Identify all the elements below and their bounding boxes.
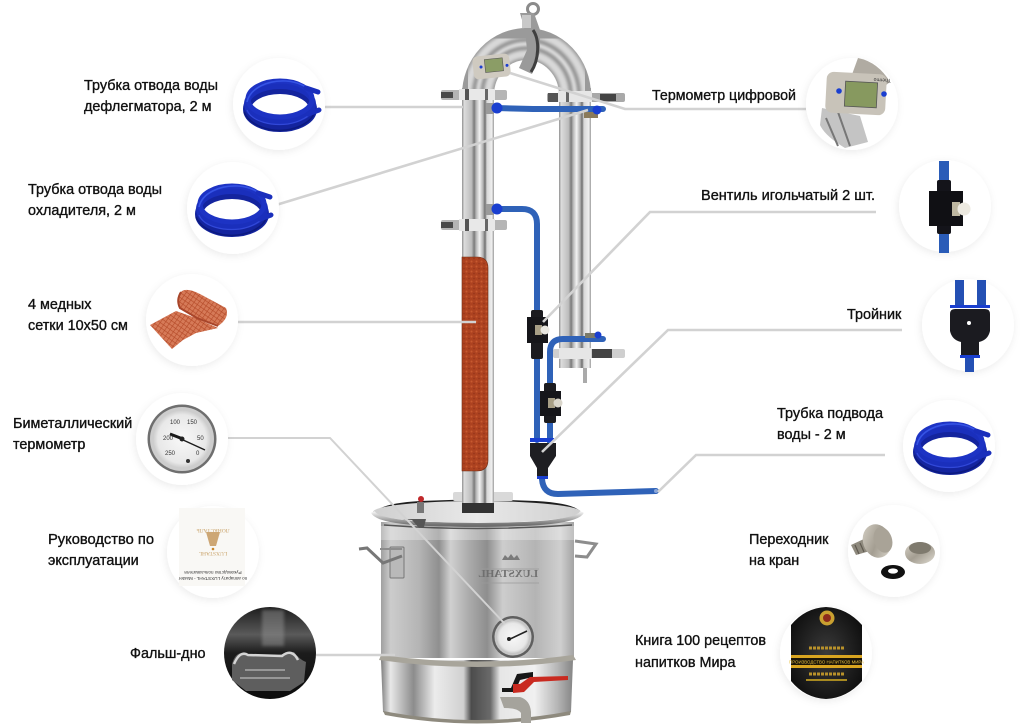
drain tap [500, 672, 568, 723]
still lower section [381, 660, 573, 722]
icon: recipe book cover [780, 607, 872, 699]
label: охладителя, 2 м [28, 203, 136, 219]
still thermometer [492, 616, 534, 658]
engraved logo: LUXSTAHL [478, 568, 538, 580]
needle valve 2 [540, 383, 562, 423]
engraved logo [478, 554, 539, 583]
label: 4 медных [28, 297, 92, 313]
label: Вентиль игольчатый 2 шт. [701, 188, 875, 204]
icon: digital thermometer [806, 58, 898, 150]
icon: digital thermometer: Thermo [873, 76, 891, 83]
label: сетки 10х50 см [28, 318, 128, 334]
label: Трубка подвода [777, 406, 883, 422]
label [28, 182, 162, 219]
label [777, 406, 883, 443]
item: false bottom [130, 607, 316, 699]
item: tap adapter [749, 505, 940, 597]
label: Руководство по [48, 532, 154, 548]
outlet tube end [654, 489, 658, 493]
top tri-clamp [519, 4, 540, 74]
icon: dial gauge: 50 [197, 436, 204, 442]
icon: tee connector [922, 279, 1014, 372]
pipe clamps [441, 89, 625, 383]
digital thermometer on bend [472, 53, 511, 80]
column base clamp [453, 490, 513, 503]
item: condenser drain tube [28, 162, 279, 254]
item: manual [48, 506, 259, 598]
condenser pipe (right) [559, 88, 591, 368]
item: digital thermometer [652, 58, 898, 150]
icon: needle valve [899, 160, 991, 253]
lid [373, 499, 582, 528]
item: copper mesh [28, 274, 238, 366]
label: термометр [13, 437, 85, 453]
still body [381, 522, 574, 658]
icon: dial gauge: 250 [165, 451, 176, 457]
still waist ring [379, 655, 576, 667]
U-bend at top [478, 44, 575, 95]
label [749, 532, 829, 569]
label: Тройник [847, 307, 902, 323]
icon: manual booklet: Руководство пользователя [184, 570, 242, 575]
item: needle valve [701, 160, 991, 253]
label [13, 416, 132, 453]
label [84, 78, 218, 115]
copper mesh window [462, 257, 488, 471]
lid valve and clip [402, 496, 426, 528]
icon: dial gauge: 150 [187, 420, 198, 426]
label [48, 532, 154, 569]
icon: manual booklet: LUXSTAHL [198, 550, 227, 556]
label: Биметаллический [13, 416, 132, 432]
icon: dial gauge: 100 [170, 420, 181, 426]
label [28, 297, 128, 334]
label: Книга 100 рецептов [635, 633, 766, 649]
icon: manual booklet [167, 506, 259, 598]
item: dephlegmator drain tube [84, 58, 325, 150]
label: воды - 2 м [777, 427, 846, 443]
icon: adapter fittings [848, 505, 940, 597]
dephlegmator pipe (left) [462, 88, 494, 492]
icon: copper mesh roll [146, 274, 238, 366]
label: Фальш-дно [130, 646, 206, 662]
still top band [381, 526, 574, 540]
label: Трубка отвода воды [28, 182, 162, 198]
label: дефлегматора, 2 м [84, 99, 212, 115]
left handle [359, 547, 404, 578]
needle valve 1 [527, 310, 550, 359]
icon: dial gauge: 200 [163, 436, 174, 442]
label: на кран [749, 553, 799, 569]
icon: dial gauge [136, 393, 228, 485]
icon: blue tube coil [903, 400, 995, 492]
icon: false bottom photo [224, 607, 316, 699]
label: напитков Мира [635, 655, 736, 671]
tee connector [530, 443, 556, 476]
label: Трубка отвода воды [84, 78, 218, 94]
bottom rim [383, 711, 571, 724]
icon: dial gauge: 0 [196, 451, 200, 457]
icon: blue tube coil [233, 58, 325, 150]
item: bimetal thermometer [13, 393, 228, 485]
tube fittings [486, 102, 602, 479]
icon: blue tube coil [187, 162, 279, 254]
icon: manual booklet: по аппарату LUXSTAHL - Master [178, 576, 247, 581]
label: Переходник [749, 532, 829, 548]
label [635, 633, 766, 671]
label: Термометр цифровой [652, 88, 796, 104]
icon: manual booklet: ЛОНКСТАЛЬ [197, 527, 229, 533]
right handle [575, 541, 596, 557]
item: water inlet tube [777, 400, 995, 492]
apparatus: column and still [359, 4, 658, 724]
label: эксплуатации [48, 553, 139, 569]
item: tee [847, 279, 1014, 372]
icon: recipe book cover: ПРОИЗВОДСТВО НАПИТКОВ МИРА [789, 660, 864, 664]
leader lines [228, 73, 902, 655]
blue water tubes [496, 108, 656, 494]
item: recipe book [635, 607, 872, 699]
